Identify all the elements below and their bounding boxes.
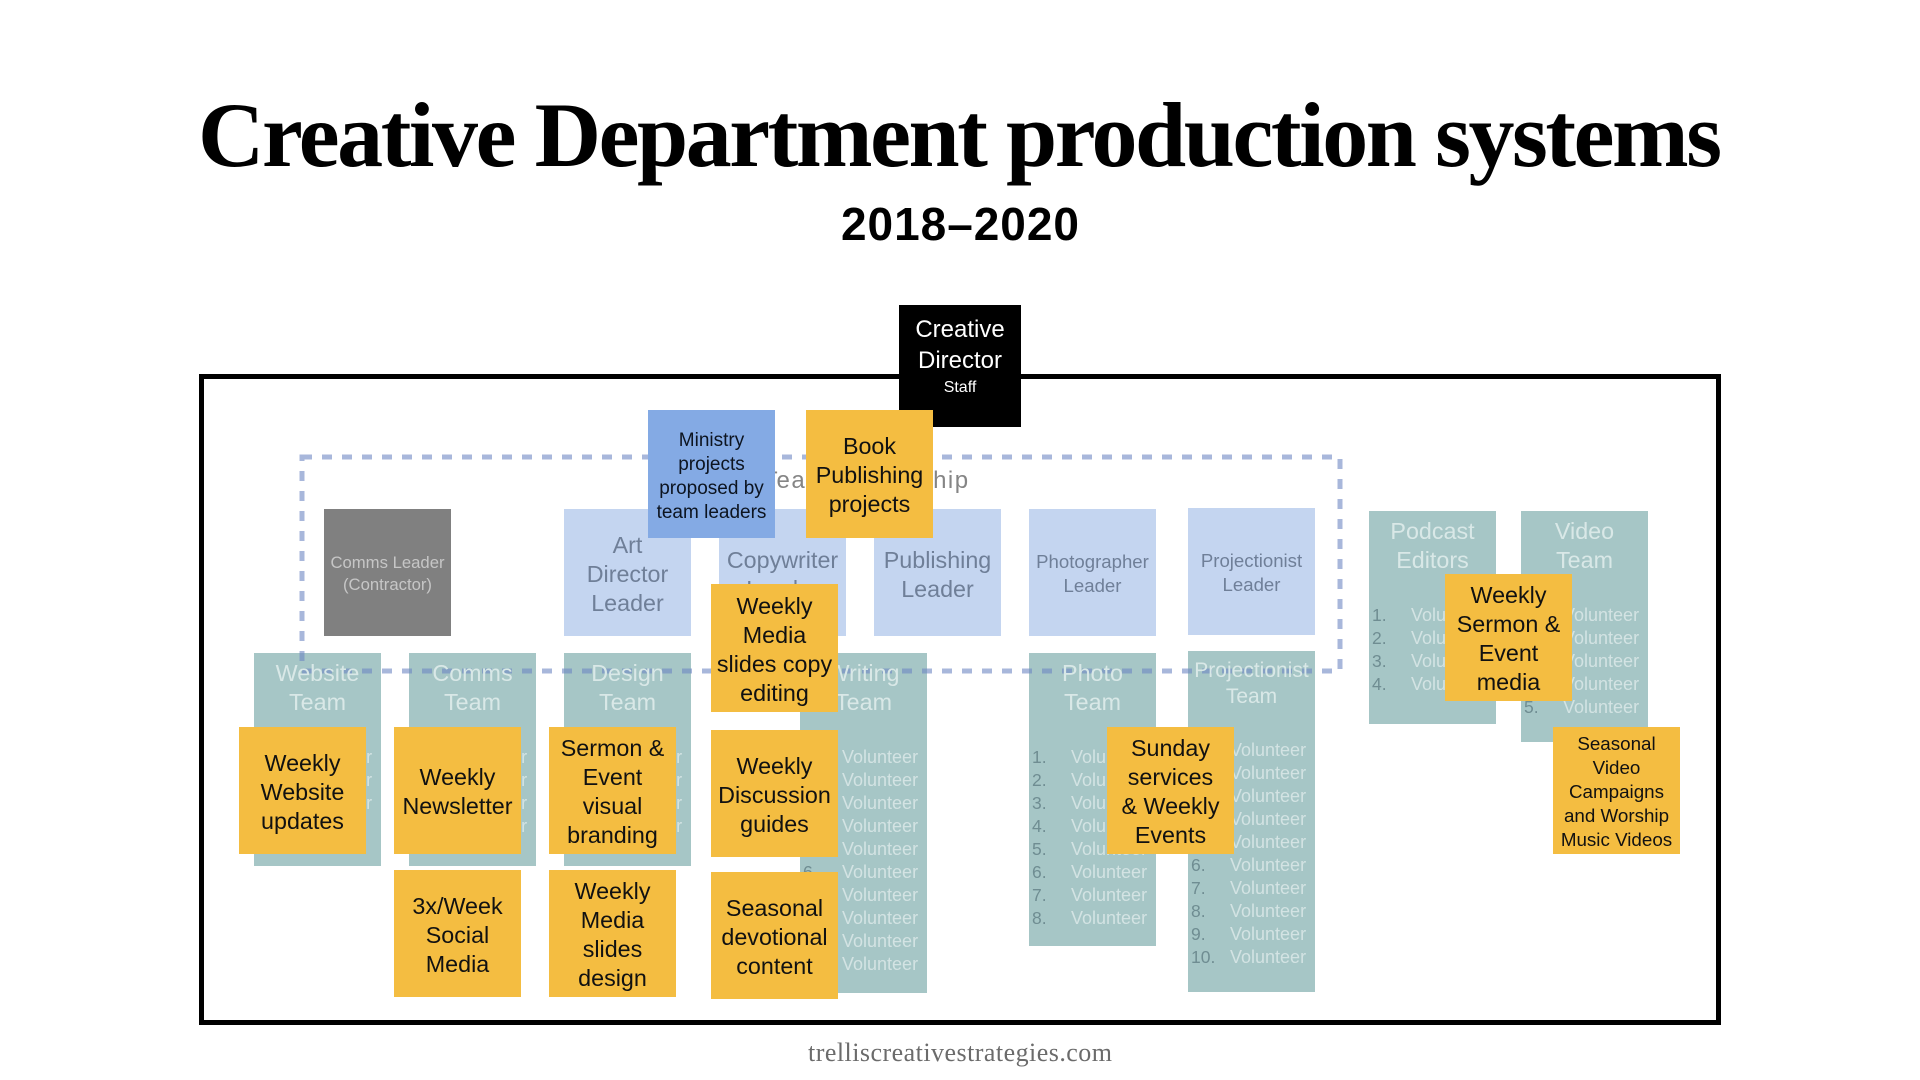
callout: Weekly Media slides copy editing: editing (740, 680, 809, 706)
team: Comms: Volunteer (451, 793, 527, 813)
callout: Weekly Media slides design (549, 870, 676, 997)
team: Projectionist: Projectionist (1194, 659, 1309, 682)
team: Projectionist: Volunteer (1230, 786, 1306, 806)
callout: Weekly Media slides design: slides (583, 936, 642, 962)
team: Comms: Volunteer (451, 747, 527, 767)
team: Projectionist: 10. (1191, 947, 1215, 967)
leader: Publishing (874, 509, 1001, 636)
team: Photo: Volunteer (1071, 908, 1147, 928)
callout: Ministry projects: Ministry (679, 430, 744, 450)
callout: Ministry projects (648, 410, 775, 538)
callout: Seasonal Video Campaigns (1553, 727, 1680, 854)
leader: Publishing: Publishing (884, 546, 991, 572)
team: Design: Volunteer (606, 816, 682, 836)
team: Writing: Volunteer (842, 931, 918, 951)
team: Website: Team (289, 688, 346, 714)
leader: Photographer (1029, 509, 1156, 636)
team: Podcast Editors: Volunteer (1411, 605, 1487, 625)
callout: Book Publishing: projects (829, 491, 910, 517)
team: Projectionist: Volunteer (1230, 924, 1306, 944)
team: Projectionist: 9. (1191, 924, 1206, 944)
callout: Sunday services and Weekly Events: & Weekly (1122, 793, 1219, 819)
box: Creative Director: Creative (915, 316, 1005, 342)
callout: Weekly Website updates: Website (261, 778, 344, 804)
team: Design: 1. (567, 747, 582, 767)
team: Projectionist (1188, 651, 1315, 992)
team: Comms: 1. (412, 747, 427, 767)
team: Projectionist: 8. (1191, 901, 1206, 921)
callout: Weekly Newsletter: Weekly (420, 764, 495, 790)
callout: Book Publishing (806, 410, 933, 538)
team: Writing: Volunteer (842, 954, 918, 974)
team: Podcast Editors: Podcast (1390, 518, 1475, 544)
footer: website: trelliscreativestrategies.com (808, 1038, 1112, 1067)
team: Photo (1029, 653, 1156, 946)
panel: department frame (199, 374, 1721, 1025)
callout: Sermon and Event visual branding (549, 727, 676, 854)
callout: Seasonal Video Campaigns: and Worship (1564, 805, 1669, 826)
callout: Weekly Website updates (239, 727, 366, 854)
callout: Weekly Media slides design: design (578, 965, 647, 991)
team: Comms: Comms (432, 660, 513, 686)
callout: Ministry projects: proposed by (659, 478, 764, 498)
callout: Weekly Website updates: Weekly (265, 750, 340, 776)
leader: Art Director: Leader (591, 590, 664, 616)
team: Photo: Photo (1062, 660, 1123, 686)
leader: Photographer: Photographer (1036, 551, 1149, 572)
team: Video: Volunteer (1563, 605, 1639, 625)
leader: Comms Leader: (Contractor) (343, 574, 432, 594)
callout: Book Publishing: Publishing (816, 462, 923, 488)
team: Photo: 8. (1032, 908, 1047, 928)
team: Design: Volunteer (606, 793, 682, 813)
team: Website: Volunteer (296, 747, 372, 767)
team: Projectionist: Volunteer (1230, 947, 1306, 967)
leader: Copywriter: Copywriter (727, 546, 838, 572)
team: Projectionist: Volunteer (1230, 901, 1306, 921)
callout: Weekly Media slides design: Weekly (575, 878, 650, 904)
team: Podcast Editors: 1. (1372, 605, 1387, 625)
team: Video: 1. (1524, 605, 1539, 625)
callout: Sunday services and Weekly Events: Sunday (1131, 735, 1210, 761)
team: Projectionist: 1. (1191, 740, 1206, 760)
team: Design: Volunteer (606, 770, 682, 790)
leader: Art Director: Art (613, 532, 642, 558)
team: Photo: Volunteer (1071, 885, 1147, 905)
team: Projectionist: Volunteer (1230, 809, 1306, 829)
leader: Projectionist: Projectionist (1201, 550, 1302, 571)
team: Photo: Volunteer (1071, 862, 1147, 882)
callout: Seasonal Video Campaigns: Seasonal (1577, 733, 1656, 754)
leader: Art Director: Director (587, 561, 668, 587)
team: Podcast Editors: Volunteer (1411, 628, 1487, 648)
callout: Book Publishing: Book (843, 433, 896, 459)
team: Writing: 2. (803, 770, 818, 790)
callout: Weekly Discussion guides: Discussion (718, 782, 831, 808)
leader: Comms Leader (324, 509, 451, 636)
team: Video (1521, 511, 1648, 742)
callout: 3x/Week Social Media: Media (426, 950, 489, 976)
team: Writing: 4. (803, 816, 818, 836)
leader: Art Director (564, 509, 691, 636)
team: Writing: 3. (803, 793, 818, 813)
team: Writing: 1. (803, 747, 818, 767)
team: Projectionist: Volunteer (1230, 832, 1306, 852)
team: Podcast Editors: 3. (1372, 651, 1387, 671)
team: Photo: 2. (1032, 770, 1047, 790)
team: Podcast Editors: 4. (1372, 674, 1387, 694)
team: Photo: 1. (1032, 747, 1047, 767)
team: Design: 3. (567, 793, 582, 813)
team: Writing: 10. (803, 954, 827, 974)
team: Video: Video (1555, 518, 1614, 544)
callout: Weekly Newsletter (394, 727, 521, 854)
team: Video: Team (1556, 547, 1613, 573)
callout: Ministry projects: team leaders (657, 502, 766, 522)
team: Design: Volunteer (606, 747, 682, 767)
team: Writing: Volunteer (842, 885, 918, 905)
callout: Weekly Media slides copy editing: Weekly (737, 592, 812, 618)
team: Comms: Volunteer (451, 816, 527, 836)
team: Website: 1. (257, 747, 272, 767)
team: Photo: Volunteer (1071, 839, 1147, 859)
team: Writing: Volunteer (842, 793, 918, 813)
callout: Weekly Newsletter: Newsletter (402, 793, 513, 819)
leader: Projectionist (1188, 508, 1315, 635)
leader: Copywriter (719, 509, 846, 636)
team: Website: Website (276, 660, 359, 686)
team: Projectionist: 7. (1191, 878, 1206, 898)
team: Writing: Team (835, 688, 892, 714)
team: Podcast Editors (1369, 511, 1496, 724)
team: Projectionist: 5. (1191, 832, 1206, 852)
callout: Weekly Sermon and Event media: media (1477, 669, 1540, 695)
callout: Weekly Media slides design: Media (581, 907, 644, 933)
team: Photo: 3. (1032, 793, 1047, 813)
team: Writing: Volunteer (842, 747, 918, 767)
team: Website: Volunteer (296, 770, 372, 790)
team: Website (254, 653, 381, 866)
callout: Weekly Discussion guides (711, 730, 838, 857)
team: Photo: Volunteer (1071, 770, 1147, 790)
callout: Seasonal Video Campaigns: Music Videos (1561, 829, 1672, 850)
team: Comms: Team (444, 688, 501, 714)
team: Comms: 2. (412, 770, 427, 790)
team: Design: 2. (567, 770, 582, 790)
team: Video: Volunteer (1563, 697, 1639, 717)
callout: 3x/Week Social Media (394, 870, 521, 997)
team: Writing: Writing (827, 660, 900, 686)
callout: 3x/Week Social Media: 3x/Week (412, 892, 503, 918)
callout: Weekly Discussion guides: Weekly (736, 752, 812, 778)
leader: Publishing: Leader (901, 576, 974, 602)
leader: Comms Leader: Comms Leader (330, 552, 445, 572)
team: Projectionist: Team (1226, 684, 1277, 708)
callout: Sermon and Event visual branding: Sermon & (561, 735, 664, 761)
callout: Seasonal devotional content: devotional (721, 924, 828, 950)
team: Comms (409, 653, 536, 866)
team: Video: 4. (1524, 674, 1539, 694)
callout: Weekly Media slides copy editing: slides copy (717, 650, 832, 676)
team: Photo: Volunteer (1071, 816, 1147, 836)
team: Video: Volunteer (1563, 651, 1639, 671)
callout: Sermon and Event visual branding: visual (583, 793, 642, 819)
team: Podcast Editors: Volunteer (1411, 674, 1487, 694)
team: Writing: 6. (803, 862, 818, 882)
team: Writing (800, 653, 927, 993)
callout: Sunday services and Weekly Events: services (1128, 764, 1213, 790)
leader: Photographer: Leader (1064, 574, 1121, 596)
team: Projectionist: Volunteer (1230, 740, 1306, 760)
callout: Weekly Discussion guides: guides (740, 810, 809, 836)
callout: Sunday services and Weekly Events (1107, 727, 1234, 854)
callout: Weekly Sermon and Event media (1445, 574, 1572, 701)
team: Projectionist: 6. (1191, 855, 1206, 875)
team: Podcast Editors: Editors (1396, 547, 1469, 573)
team: Photo: Volunteer (1071, 747, 1147, 767)
team: Podcast Editors: 2. (1372, 628, 1387, 648)
callout: Weekly Sermon and Event media: Sermon & (1457, 611, 1560, 637)
dashed boundary: team leadership (300, 454, 1342, 674)
team: Projectionist: 2. (1191, 763, 1206, 783)
callout: Ministry projects: projects (678, 454, 745, 474)
callout: Seasonal Video Campaigns: Video (1593, 757, 1640, 778)
callout: Sermon and Event visual branding: branding (567, 822, 658, 848)
label: Team Leadership: Team Leadership (763, 467, 970, 494)
team: Projectionist: Volunteer (1230, 763, 1306, 783)
team: Projectionist: 4. (1191, 809, 1206, 829)
callout: Sunday services and Weekly Events: Events (1135, 822, 1206, 848)
callout: Weekly Sermon and Event media: Event (1479, 640, 1538, 666)
team: Video: 5. (1524, 697, 1539, 717)
team: Writing: 8. (803, 908, 818, 928)
team: Writing: Volunteer (842, 908, 918, 928)
callout: Seasonal devotional content: Seasonal (726, 894, 823, 920)
team: Comms: 3. (412, 793, 427, 813)
team: Writing: 7. (803, 885, 818, 905)
box: Creative Director: Director (918, 346, 1002, 374)
team: Photo: Team (1064, 688, 1121, 714)
team: Comms: 4. (412, 816, 427, 836)
team: Video: 3. (1524, 651, 1539, 671)
callout: Weekly Media slides copy editing (711, 584, 838, 712)
team: Photo: 7. (1032, 885, 1047, 905)
team: Comms: Volunteer (451, 770, 527, 790)
team: Photo: 5. (1032, 839, 1047, 859)
leader: Projectionist: Leader (1223, 574, 1280, 594)
team: Projectionist: 3. (1191, 786, 1206, 806)
callout: Seasonal Video Campaigns: Campaigns (1569, 781, 1664, 802)
team: Writing: 5. (803, 839, 818, 859)
team: Design: Design (591, 660, 664, 686)
team: Video: Volunteer (1563, 628, 1639, 648)
team: Photo: Volunteer (1071, 793, 1147, 813)
team: Design: Team (599, 688, 656, 714)
team: Website: Volunteer (296, 793, 372, 813)
team: Website: 3. (257, 793, 272, 813)
team: Writing: 9. (803, 931, 818, 951)
callout: Seasonal devotional content: content (736, 952, 813, 978)
team: Projectionist: Volunteer (1230, 855, 1306, 875)
callout: Weekly Sermon and Event media: Weekly (1471, 582, 1546, 608)
team: Podcast Editors: Volunteer (1411, 651, 1487, 671)
team: Writing: Volunteer (842, 839, 918, 859)
team: Video: 2. (1524, 628, 1539, 648)
team: Writing: Volunteer (842, 770, 918, 790)
team: Photo: 4. (1032, 816, 1047, 836)
team: Design: 4. (567, 816, 582, 836)
box: Creative Director (899, 305, 1021, 427)
subtitle: years: 2018–2020 (841, 198, 1079, 250)
leader: Copywriter: Leader (746, 576, 819, 602)
callout: Seasonal devotional content (711, 872, 838, 999)
box: Creative Director: Staff (944, 378, 976, 396)
team: Writing: Volunteer (842, 862, 918, 882)
team: Photo: 6. (1032, 862, 1047, 882)
callout: Weekly Website updates: updates (261, 808, 344, 834)
team: Writing: Volunteer (842, 816, 918, 836)
team: Website: 2. (257, 770, 272, 790)
team: Video: Volunteer (1563, 674, 1639, 694)
callout: Weekly Media slides copy editing: Media (743, 622, 806, 648)
callout: Sermon and Event visual branding: Event (583, 764, 642, 790)
team: Design (564, 653, 691, 866)
callout: 3x/Week Social Media: Social (426, 922, 489, 948)
team: Projectionist: Volunteer (1230, 878, 1306, 898)
